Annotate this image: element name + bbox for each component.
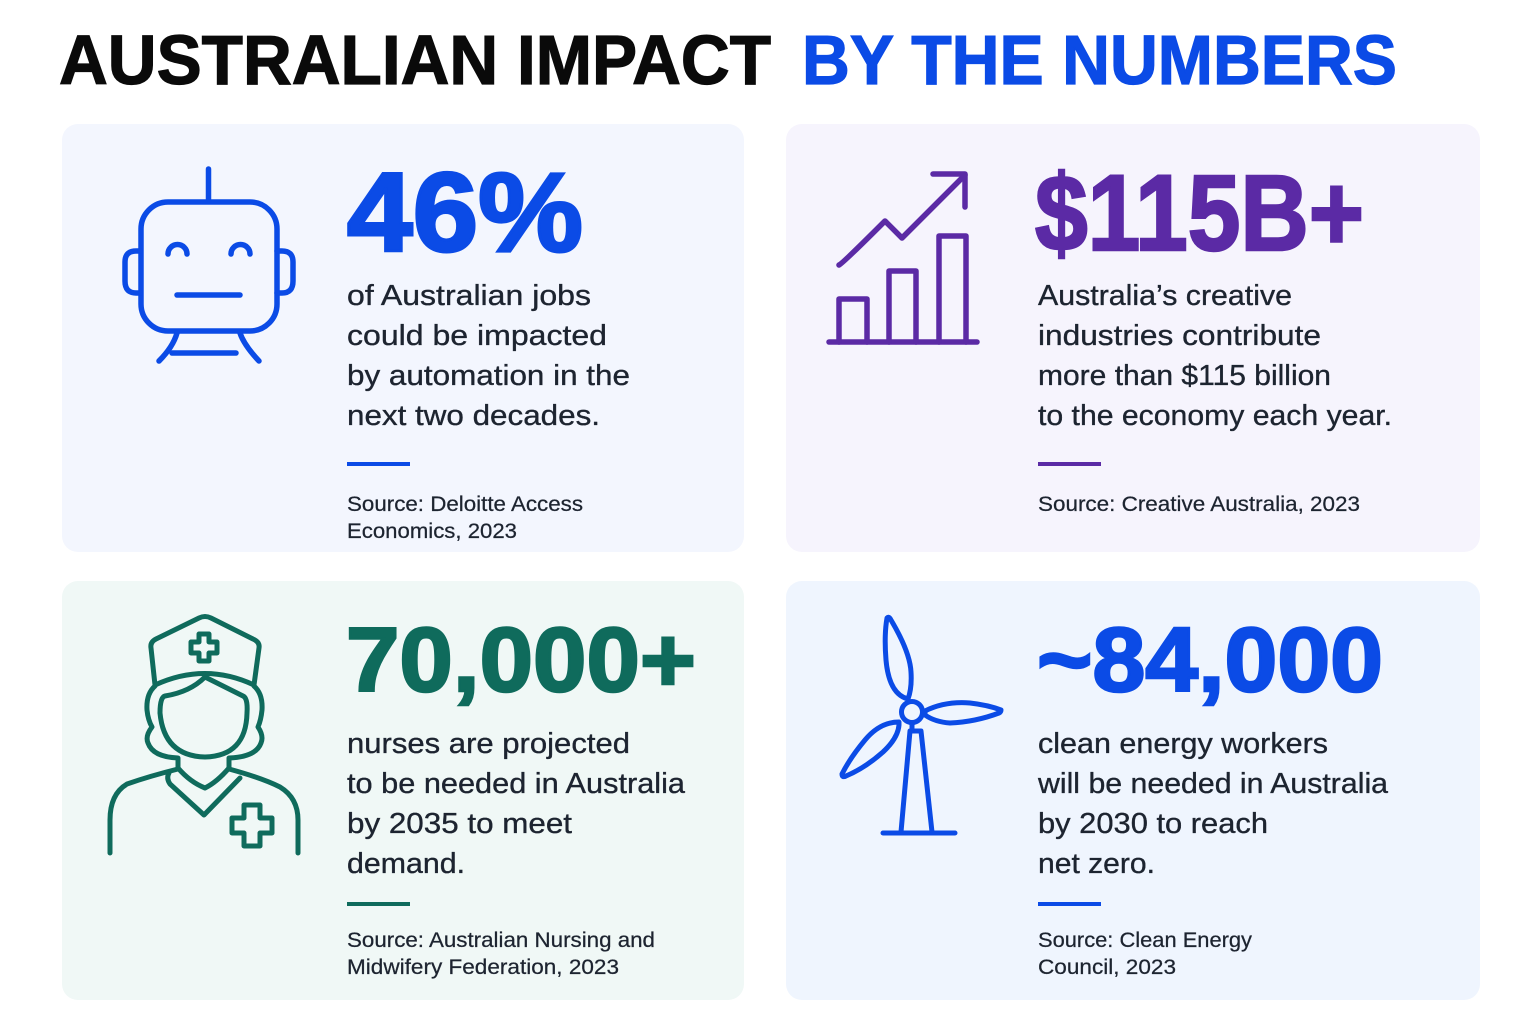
icon: growth chart: [829, 174, 977, 342]
description: nurses: by 2035 to meet: [347, 808, 572, 840]
description: clean energy: will be needed in Australia: [1037, 768, 1388, 800]
description: nurses: nurses are projected: [347, 728, 630, 760]
description: automation: by automation in the: [347, 360, 630, 392]
description: automation: [347, 280, 630, 432]
description: clean energy: clean energy workers: [1038, 728, 1328, 760]
source: ANMF: [347, 928, 655, 979]
icon: robot: [125, 169, 293, 361]
source: Clean Energy Council: [1038, 928, 1252, 979]
title: AUSTRALIAN IMPACT: [59, 21, 771, 99]
source: Deloitte: Economics, 2023: [347, 519, 517, 543]
panel: clean energy: [786, 581, 1480, 1000]
source: ANMF: Source: Australian Nursing and: [347, 928, 655, 952]
description: automation: next two decades.: [347, 400, 600, 432]
source: Deloitte: [347, 492, 583, 543]
panel: creative industries: [786, 124, 1480, 552]
description: creative: to the economy each year.: [1038, 400, 1392, 432]
description: nurses: [347, 728, 685, 880]
description: creative: more than $115 billion: [1038, 360, 1331, 392]
description: automation: could be impacted: [347, 320, 607, 352]
description: automation: of Australian jobs: [347, 280, 591, 312]
description: clean energy: by 2030 to reach: [1038, 808, 1268, 840]
description: creative: [1038, 280, 1392, 432]
panel: automation jobs: [62, 124, 744, 552]
icon: wind turbine: [842, 617, 1001, 833]
title: BY THE NUMBERS: [802, 21, 1397, 99]
description: clean energy: net zero.: [1038, 848, 1155, 880]
description: clean energy: [1037, 728, 1388, 880]
title: [59, 21, 1397, 99]
source: Clean Energy Council: Council, 2023: [1038, 955, 1176, 979]
source: Creative Australia: Source: Creative Australia, 2023: [1038, 492, 1360, 516]
source: Deloitte: Source: Deloitte Access: [347, 492, 583, 516]
description: creative: Australia’s creative: [1038, 280, 1292, 312]
statistic: 70,000+: 70,000+: [346, 610, 696, 711]
statistic: ~84,000: ~84,000: [1037, 610, 1383, 711]
statistic: $115B+: $115B+: [1035, 152, 1364, 273]
description: creative: industries contribute: [1038, 320, 1321, 352]
icon: nurse: [110, 616, 298, 853]
description: nurses: to be needed in Australia: [347, 768, 685, 800]
statistic: 46%: 46%: [347, 150, 583, 275]
description: nurses: demand.: [347, 848, 465, 880]
source: ANMF: Midwifery Federation, 2023: [347, 955, 619, 979]
panel: nurses: [62, 581, 744, 1000]
source: Clean Energy Council: Source: Clean Energy: [1038, 928, 1252, 952]
